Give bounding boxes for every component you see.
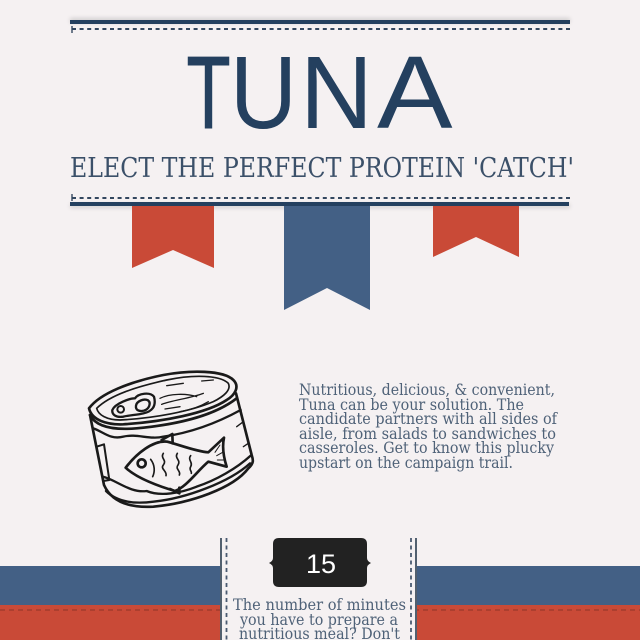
number badge: 15 (306, 549, 336, 579)
header top rule (70, 18, 570, 33)
ribbon: centre blue (284, 206, 370, 310)
red band (0, 605, 640, 640)
intro text block: upstart on the campaign trail. (299, 454, 513, 472)
title: U (230, 34, 297, 150)
intro text block: Nutritious, delicious, & convenient, (299, 381, 555, 399)
panel text: The number of minutes (233, 596, 406, 614)
title: A (377, 35, 453, 150)
title: T (186, 35, 231, 150)
number badge (269, 538, 371, 587)
intro text block: Tuna can be your solution. The (299, 396, 524, 414)
intro text block: candidate partners with all sides of (299, 410, 558, 428)
blue band (0, 566, 640, 605)
panel text: you have to prepare a (239, 611, 398, 629)
panel: 15 minutes (220, 538, 417, 640)
icon: tuna can (89, 372, 253, 507)
intro text block: aisle, from salads to sandwiches to (299, 425, 556, 443)
title: N (300, 35, 373, 150)
ribbon: right red (433, 206, 519, 257)
intro text block: casseroles. Get to know this plucky (299, 439, 554, 457)
header bottom rule (70, 194, 570, 208)
panel text (233, 596, 406, 640)
subtitle: ELECT THE PERFECT PROTEIN 'CATCH' (70, 153, 574, 184)
intro text block (299, 381, 558, 472)
ribbon: left red (132, 206, 214, 268)
title (186, 34, 453, 150)
